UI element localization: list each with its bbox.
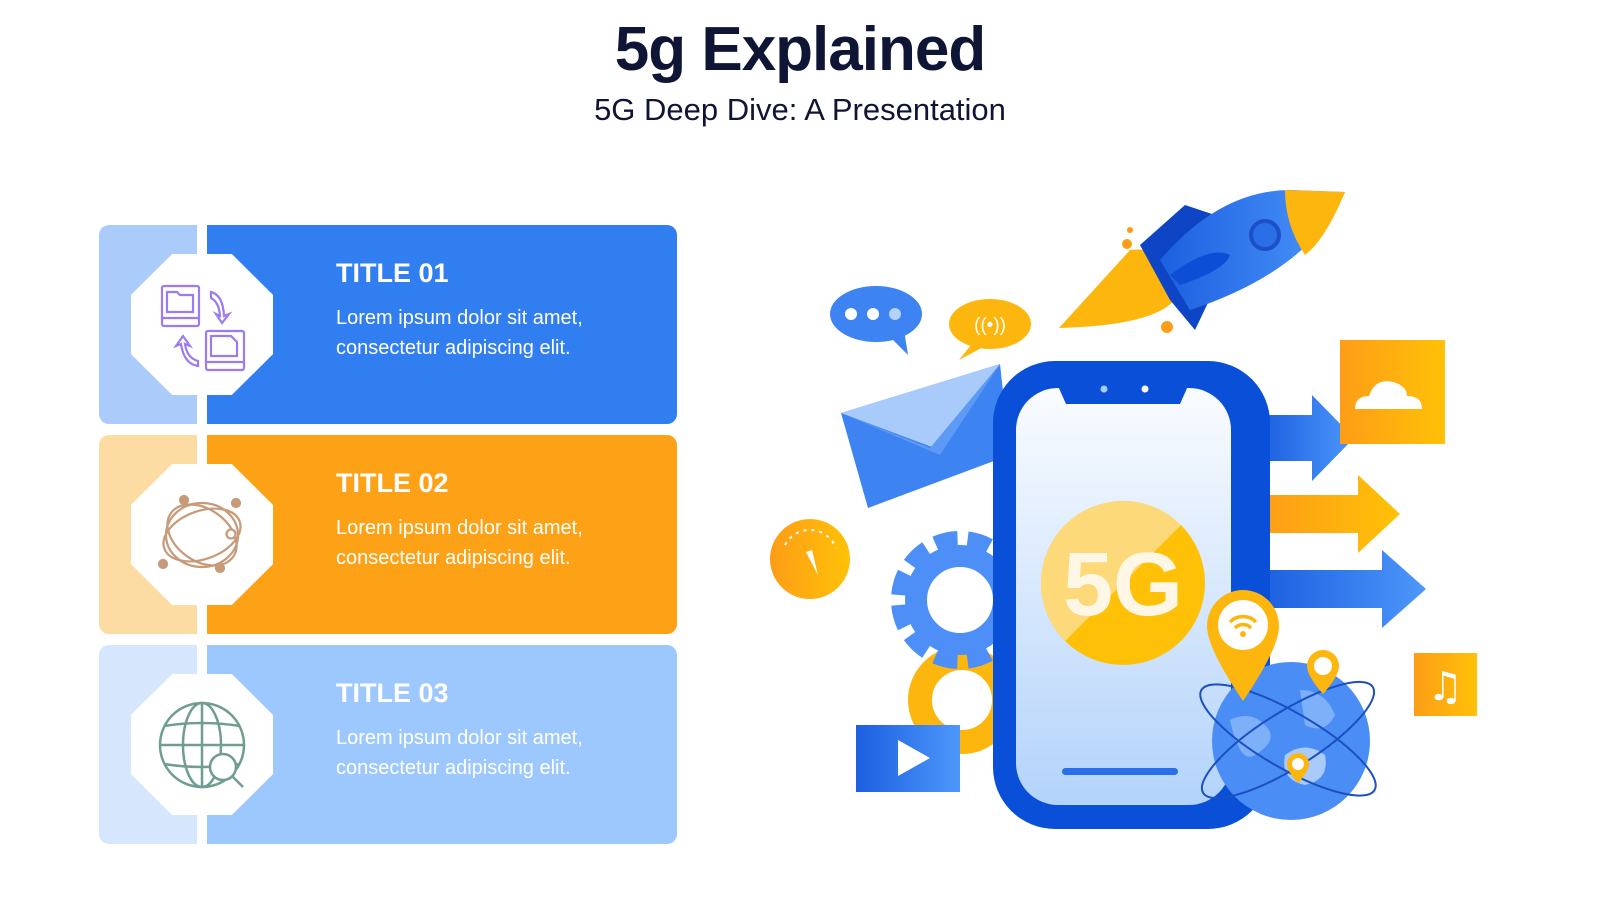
text block 03: TITLE 03 (336, 678, 449, 708)
phone: 5G (1063, 535, 1183, 635)
music tile: ♫ (1427, 664, 1463, 710)
cloud tile (1340, 340, 1445, 444)
gears (906, 546, 1014, 742)
panel: title 01: Lorem ipsum dolor sit amet, (336, 307, 583, 329)
chat bubble yellow (949, 299, 1031, 360)
globe (1187, 662, 1389, 820)
text block 01: TITLE 01 (336, 258, 449, 288)
icon: globe search (131, 674, 273, 815)
location pins (1207, 590, 1339, 783)
panel: title 02: consectetur adipiscing elit. (336, 547, 571, 569)
music tile (1414, 653, 1477, 716)
panel: title 03: consectetur adipiscing elit. (336, 757, 571, 779)
panel: title 03: Lorem ipsum dolor sit amet, (336, 727, 583, 749)
rocket (1059, 190, 1345, 333)
panel: title 01 (99, 225, 677, 424)
panel: title 03 (99, 645, 677, 844)
title: 5g Explained (615, 15, 985, 84)
envelope (841, 364, 1010, 508)
text block 02: TITLE 02 (336, 468, 449, 498)
phone (993, 361, 1270, 829)
icon: orbit (131, 464, 273, 605)
video play (856, 725, 960, 792)
panel: title 02 (99, 435, 677, 634)
subtitle: 5G Deep Dive: A Presentation (594, 92, 1006, 127)
panel: title 02: Lorem ipsum dolor sit amet, (336, 517, 583, 539)
5G badge (1041, 501, 1205, 665)
panel: title 01: consectetur adipiscing elit. (336, 337, 571, 359)
chat bubble blue (830, 286, 922, 355)
chat bubble yellow: ((•)) (974, 315, 1006, 336)
speedometer (770, 519, 850, 599)
arrows (1262, 395, 1426, 628)
icon: file transfer (131, 254, 273, 395)
